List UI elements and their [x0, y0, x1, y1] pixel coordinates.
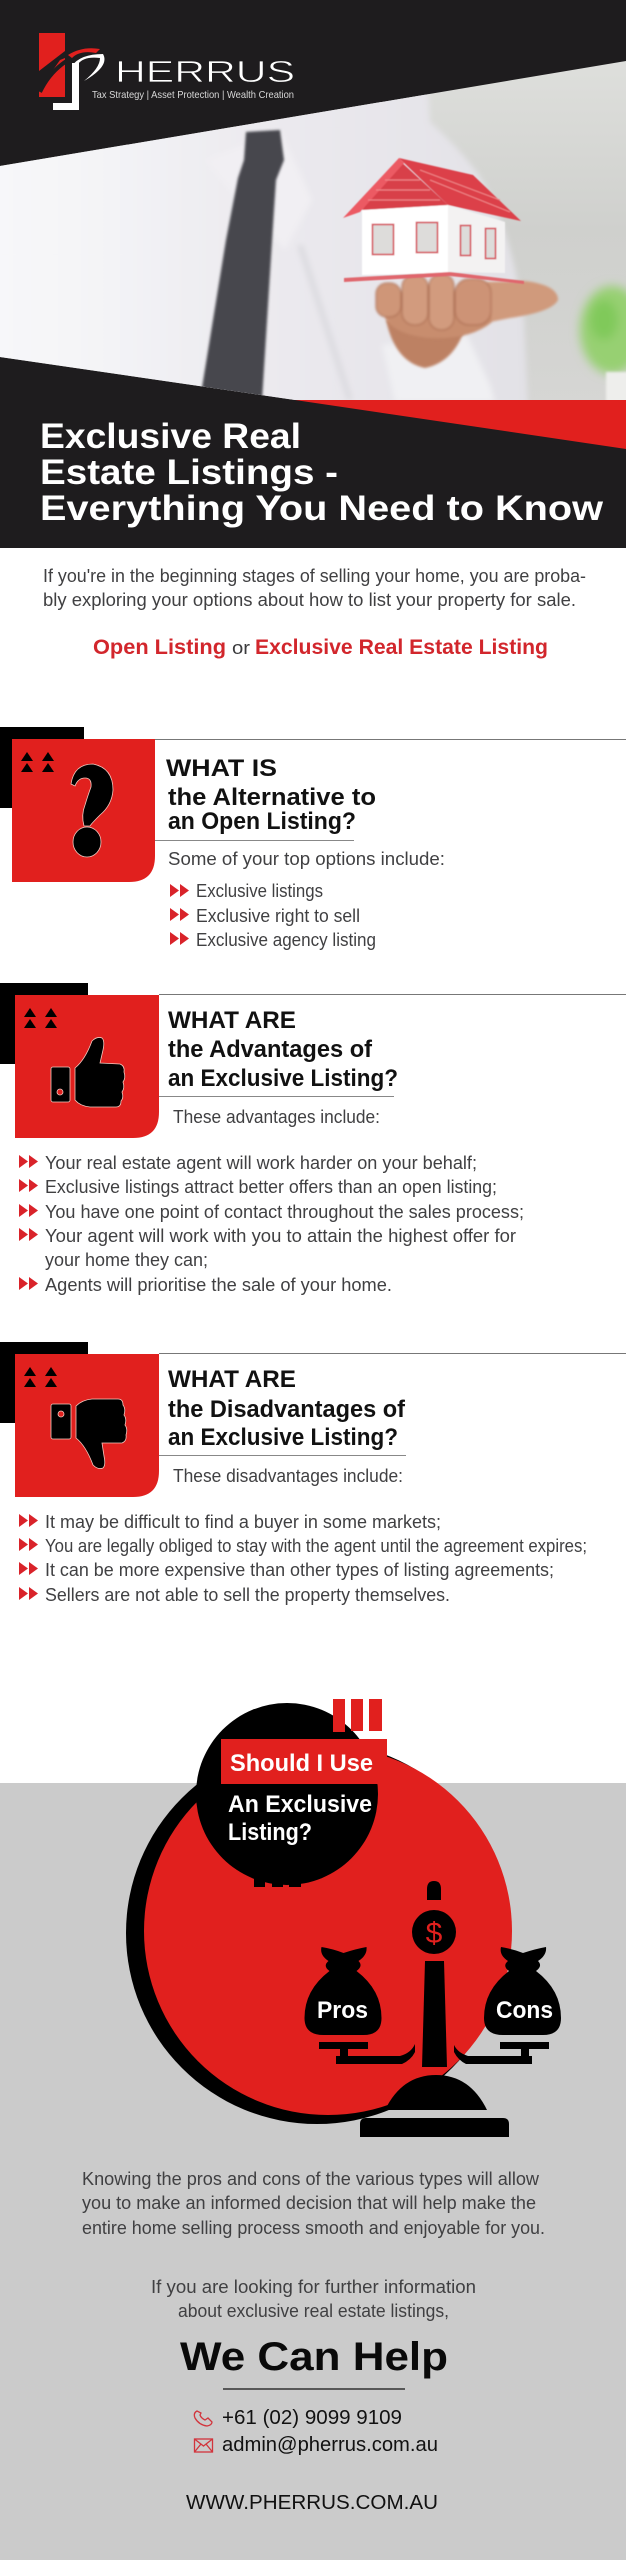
list: Exclusive listings	[196, 881, 323, 901]
list: Your real estate agent will work harder on your behalf;	[45, 1153, 477, 1173]
heading: WHAT IS	[166, 755, 277, 782]
heading in circle: Listing?	[228, 1819, 312, 1846]
icon: thumbs down	[51, 1399, 127, 1469]
model house	[343, 158, 524, 284]
hero photo: businessman holding a model house	[0, 50, 626, 410]
hand	[376, 274, 558, 338]
heading	[168, 1366, 406, 1451]
list: Exclusive agency listing	[196, 930, 376, 950]
panel: disadvantages: These disadvantages include:	[173, 1466, 403, 1486]
website: WWW.PHERRUS.COM.AU	[186, 2492, 438, 2514]
closing paragraph: entire home selling process smooth and enjoyable for you.	[82, 2218, 545, 2238]
phone number: +61 (02) 9099 9109	[222, 2407, 402, 2429]
title: Everything You Need to Know	[40, 489, 604, 528]
title	[40, 417, 604, 528]
listing types line: Exclusive Real Estate Listing	[255, 636, 548, 659]
grey footer panel	[0, 1783, 626, 2560]
list: Your agent will work with you to attain the highest offer for	[45, 1226, 516, 1246]
icon: thumbs up	[51, 1037, 125, 1107]
listing types line: Open Listing	[93, 636, 226, 659]
list	[19, 1153, 524, 1295]
title: Exclusive Real	[40, 417, 301, 456]
intro text	[43, 566, 586, 610]
icon: phone	[194, 2411, 212, 2426]
right pan	[454, 2042, 549, 2064]
intro text: bly exploring your options about how to list your property for sale.	[43, 590, 576, 610]
left pan	[319, 2042, 415, 2064]
further information text	[151, 2277, 476, 2321]
panel: disadvantages	[0, 1342, 626, 1605]
heading in circle: An Exclusive	[228, 1791, 372, 1818]
title: Estate Listings -	[40, 453, 338, 492]
list: You are legally obliged to stay with the agent until the agreement expires;	[45, 1536, 587, 1556]
further information text: about exclusive real estate listings,	[178, 2301, 449, 2321]
closing paragraph: you to make an informed decision that will help make the	[82, 2193, 536, 2213]
money bag: cons	[484, 1947, 561, 2035]
list: your home they can;	[45, 1250, 208, 1270]
list: Exclusive right to sell	[196, 906, 360, 926]
heading tab	[221, 1739, 387, 1784]
email: admin@pherrus.com.au	[222, 2434, 438, 2456]
list: You have one point of contact throughout the sales process;	[45, 1202, 524, 1222]
panel: advantages	[0, 983, 626, 1295]
icon: balance scale	[304, 1881, 561, 2137]
heading: an Exclusive Listing?	[168, 1424, 398, 1451]
header dark band	[0, 0, 626, 548]
red bars	[333, 1699, 382, 1732]
tie	[200, 130, 284, 400]
logo: Tax Strategy | Asset Protection | Wealth Creation	[92, 89, 294, 101]
heading	[168, 1007, 398, 1092]
list	[19, 1512, 587, 1605]
intro text: If you're in the beginning stages of selling your home, you are proba-	[43, 566, 586, 586]
money bag: pros	[304, 1947, 382, 2035]
logo	[39, 33, 295, 110]
logo: HERRUS	[115, 54, 295, 89]
heading: WHAT ARE	[168, 1366, 296, 1393]
we can help heading: We Can Help	[180, 2335, 448, 2379]
panel: alternative to an open listing: Some of your top options include:	[168, 849, 445, 869]
further information text: If you are looking for further information	[151, 2277, 476, 2297]
heading: WHAT ARE	[168, 1007, 296, 1034]
illustration: should I use an exclusive listing	[126, 1699, 561, 2137]
money bag: pros: Pros	[317, 1997, 368, 2024]
listing types line: or	[232, 638, 250, 658]
heading: the Advantages of	[168, 1036, 373, 1063]
illustration: should I use an exclusive listing: Should I Use	[230, 1750, 373, 1777]
heading: the Disadvantages of	[168, 1396, 406, 1423]
cuff and wrist	[386, 337, 492, 400]
panel: alternative to an open listing	[0, 727, 626, 950]
icon: mail	[194, 2439, 212, 2452]
list: Agents will prioritise the sale of your home.	[45, 1275, 392, 1295]
icon: question mark	[71, 764, 113, 857]
list: It can be more expensive than other types of listing agreements;	[45, 1560, 554, 1580]
listing types line	[93, 636, 548, 659]
heading	[166, 755, 376, 835]
heading in circle	[228, 1791, 372, 1846]
list: Sellers are not able to sell the property themselves.	[45, 1585, 450, 1605]
heading: the Alternative to	[168, 784, 376, 811]
closing paragraph	[82, 2169, 545, 2238]
money bag: cons: Cons	[496, 1997, 553, 2024]
plant	[580, 286, 626, 374]
heading: an Exclusive Listing?	[168, 1065, 398, 1092]
heading: an Open Listing?	[168, 808, 356, 835]
closing paragraph: Knowing the pros and cons of the various types will allow	[82, 2169, 540, 2189]
list: Exclusive listings attract better offers than an open listing;	[45, 1177, 497, 1197]
panel: advantages: These advantages include:	[173, 1107, 380, 1127]
list: It may be difficult to find a buyer in some markets;	[45, 1512, 441, 1532]
icon: balance scale: $	[426, 1917, 443, 1950]
shirt	[0, 90, 528, 410]
list	[170, 881, 376, 950]
red accent wedge	[295, 400, 626, 449]
